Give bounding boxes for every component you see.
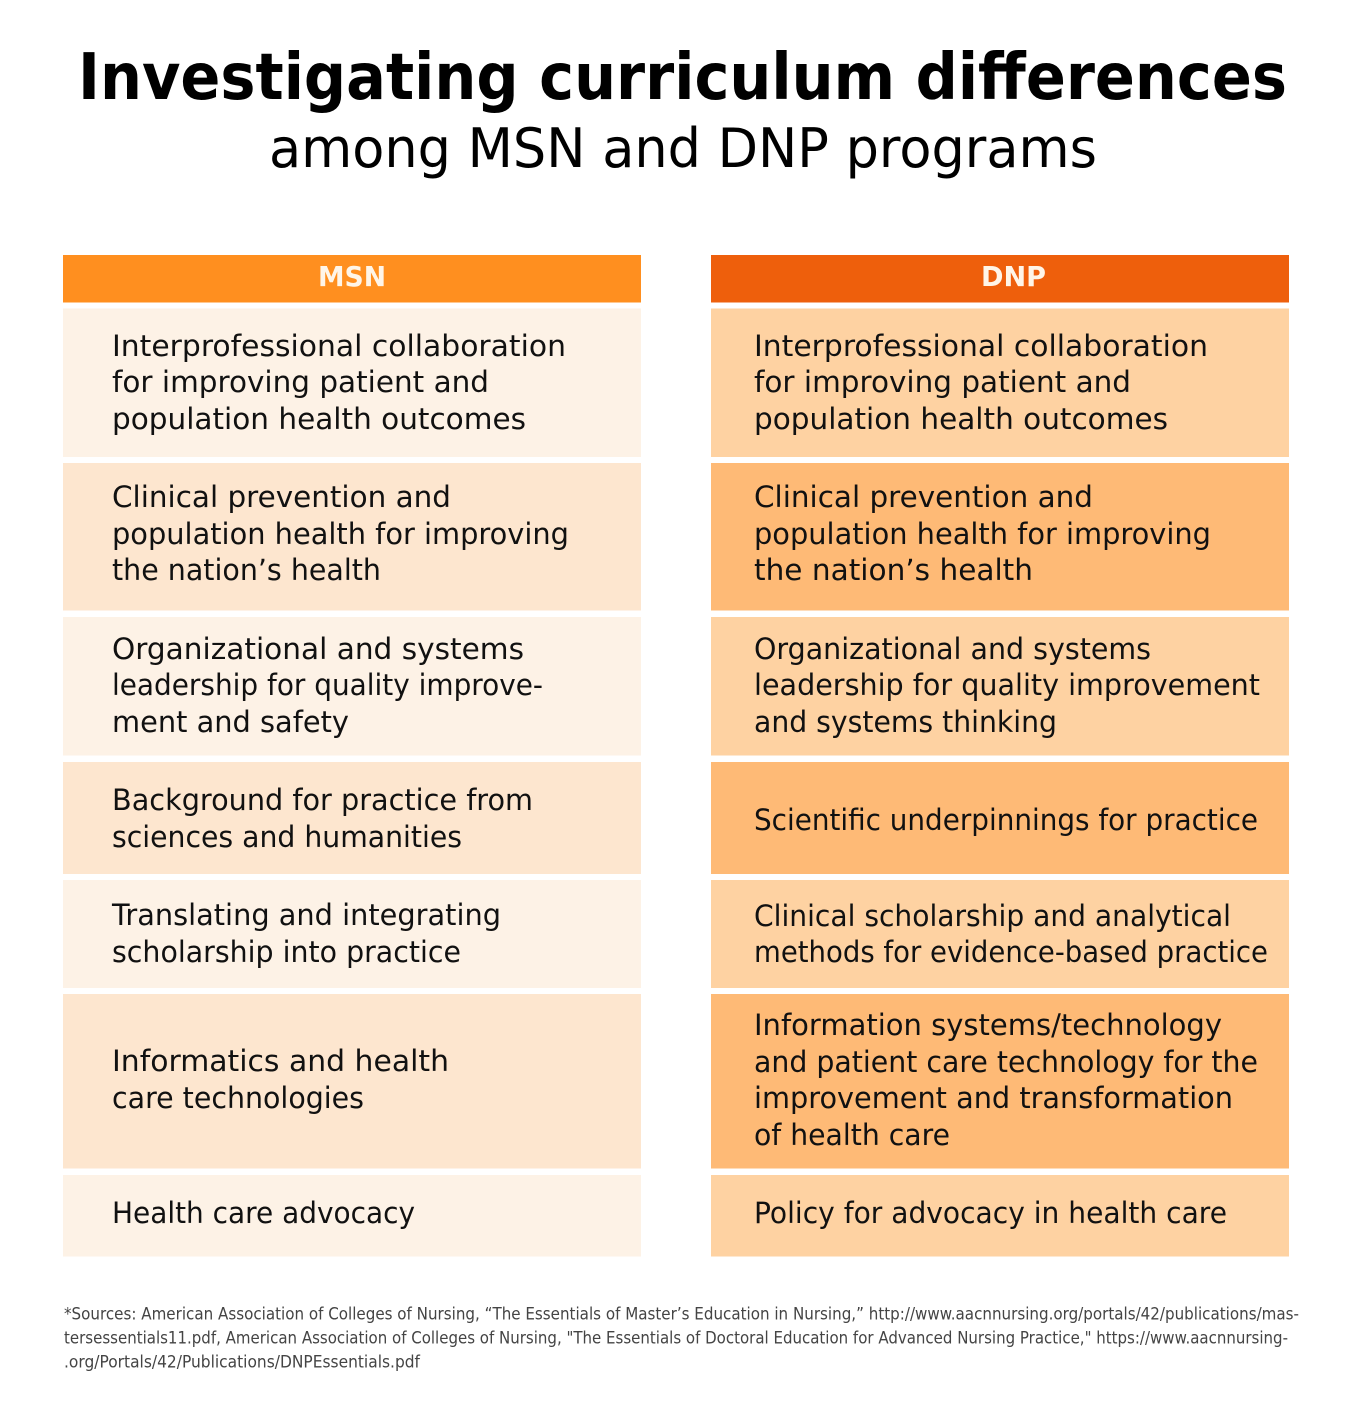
DNP row 1: Interprofessional collaboration [754,329,1208,363]
MSN row 5: scholarship into practice [112,935,461,969]
DNP row 5 [711,880,1289,988]
DNP row 7: Policy for advocacy in health care [754,1196,1227,1230]
MSN row 4: Background for practice from [112,783,533,817]
MSN row 3: leadership for quality improve- [112,668,543,702]
footnote: sources: .org/Portals/42/Publications/DNPEssentials.pdf [64,1352,421,1372]
DNP row 2 [711,463,1289,610]
DNP row 2: population health for improving [754,517,1211,551]
MSN header [63,255,641,302]
MSN row 2: Clinical prevention and [112,480,451,514]
MSN row 3: ment and safety [112,705,349,739]
subtitle line: among MSN and DNP programs [269,117,1097,180]
footnote: sources [64,1304,1299,1372]
title line 1: Investigating curriculum differences [78,41,1287,115]
DNP row 5: Clinical scholarship and analytical [754,899,1231,933]
DNP row 4: Scientific underpinnings for practice [754,803,1258,837]
panel: DNP column [711,255,1289,1256]
MSN row 3: Organizational and systems [112,632,524,666]
MSN row 5 [63,880,641,988]
DNP row 1: for improving patient and [754,365,1131,399]
DNP row 6: of health care [754,1118,950,1152]
DNP row 3: and systems thinking [754,705,1057,739]
MSN row 1 [63,308,641,457]
DNP row 7 [711,1175,1289,1256]
MSN row 4 [63,762,641,874]
MSN row 7 [63,1175,641,1256]
DNP row 4 [711,762,1289,874]
DNP row 2: Clinical prevention and [754,480,1093,514]
DNP row 3: Organizational and systems [754,632,1151,666]
MSN row 1: for improving patient and [112,365,489,399]
DNP row 6: Information systems/technology [754,1008,1222,1042]
DNP row 1: population health outcomes [754,402,1168,436]
MSN row 6: care technologies [112,1081,364,1115]
DNP row 5: methods for evidence-based practice [754,935,1268,969]
MSN row 1: population health outcomes [112,402,526,436]
MSN row 2: the nation’s health [112,553,381,587]
MSN row 2: population health for improving [112,517,569,551]
panel: MSN column [63,255,641,1256]
MSN row 1: Interprofessional collaboration [112,329,566,363]
DNP row 3: leadership for quality improvement [754,668,1260,702]
MSN header: MSN [318,260,386,293]
MSN row 7: Health care advocacy [112,1196,415,1230]
MSN row 5: Translating and integrating [111,898,501,932]
DNP row 6: improvement and transformation [754,1081,1233,1115]
DNP row 3 [711,617,1289,756]
DNP row 2: the nation’s health [754,553,1033,587]
MSN row 3 [63,617,641,756]
DNP header [711,255,1289,302]
MSN row 2 [63,463,641,610]
MSN row 6 [63,994,641,1168]
MSN row 4: sciences and humanities [112,820,462,854]
title [78,41,1287,180]
DNP row 1 [711,308,1289,457]
DNP row 6: and patient care technology for the [754,1045,1258,1079]
MSN row 6: Informatics and health [112,1044,449,1078]
DNP row 6 [711,994,1289,1168]
DNP header: DNP [981,260,1046,293]
